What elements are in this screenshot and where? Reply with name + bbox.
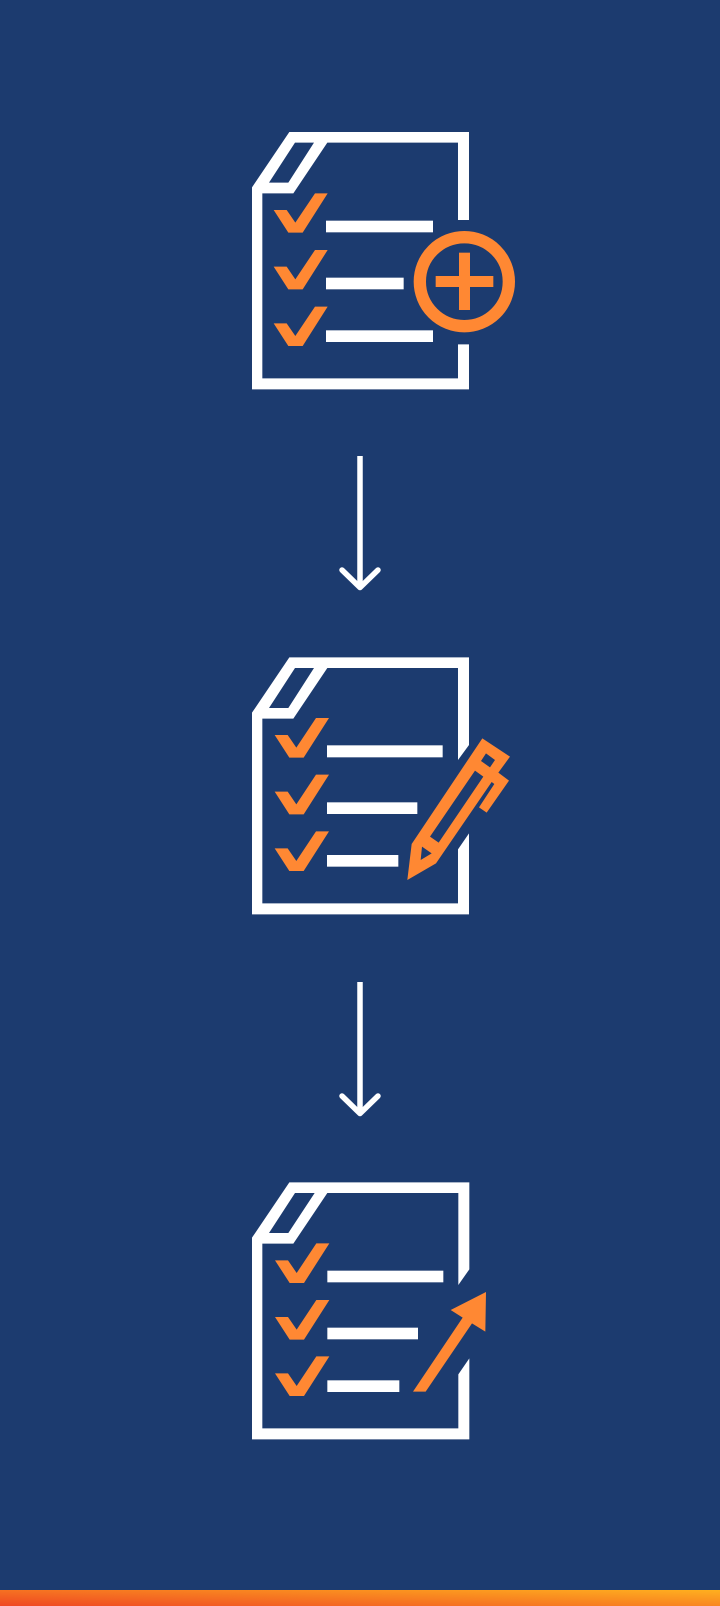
plus badge — [420, 237, 509, 326]
check marks — [275, 718, 329, 871]
list lines — [327, 1271, 443, 1392]
icon: checklist with up arrow — [252, 1182, 486, 1439]
icon: checklist with plus — [252, 132, 509, 389]
check marks — [274, 193, 328, 346]
icon: checklist with pencil — [252, 657, 510, 914]
gradient footer band — [0, 1590, 720, 1606]
arrow: down to improve step — [342, 982, 378, 1114]
pencil — [407, 738, 510, 880]
growth arrow — [413, 1292, 486, 1392]
check marks — [275, 1243, 329, 1396]
document outline — [252, 132, 469, 389]
list lines — [326, 221, 433, 342]
arrow: down to edit step — [342, 456, 378, 588]
document outline — [252, 657, 469, 914]
document outline — [252, 1182, 469, 1439]
list lines — [327, 745, 443, 867]
